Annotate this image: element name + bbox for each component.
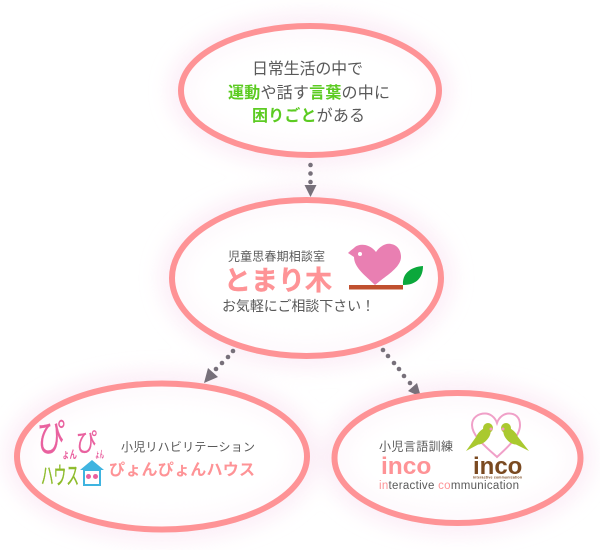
arrow: middle to right — [381, 348, 421, 397]
icon: inco logo with heart and birds — [466, 414, 529, 480]
text: line 2: 運動や話す言葉の中に — [228, 84, 390, 102]
icon: inco logo with heart and birds: inco — [473, 453, 522, 480]
text: interactive communication: interactive communication — [379, 480, 519, 492]
panel: bottom-left ellipse — [17, 384, 307, 530]
text: clinic type: 児童思春期相談室 — [228, 250, 325, 264]
panel: middle ellipse — [172, 200, 441, 356]
text: line 1: 日常生活の中で — [252, 60, 363, 78]
text: line 3: 困りごとがある — [252, 106, 365, 125]
icon: inco logo with heart and birds: interactive communication — [473, 476, 522, 480]
text: speech training label: 小児言語訓練 — [379, 440, 453, 454]
icon: pyonpyon house logo: ハウス — [41, 463, 79, 490]
icon: heart bird on branch — [348, 244, 423, 290]
panel: bottom-left ellipse: ょん — [95, 449, 104, 461]
text: invitation: お気軽にご相談下さい！ — [222, 298, 375, 314]
panel: top ellipse — [181, 26, 439, 155]
panel: bottom-right ellipse — [334, 393, 580, 523]
icon: pyonpyon house logo: ぴ — [37, 418, 65, 460]
icon: pyonpyon house logo — [37, 418, 104, 490]
arrow: middle to left — [204, 349, 235, 383]
text: tomarigi title: とまり木 — [224, 266, 332, 296]
text: rehabilitation label: 小児リハビリテーション — [121, 440, 255, 454]
text: pyonpyon house name: ぴょんぴょんハウス — [109, 461, 255, 479]
arrow: top to middle — [304, 163, 316, 197]
text: inco name: inco — [381, 453, 431, 480]
icon: pyonpyon house logo: ぴ — [76, 429, 97, 457]
icon: pyonpyon house logo: ょん — [62, 448, 77, 461]
